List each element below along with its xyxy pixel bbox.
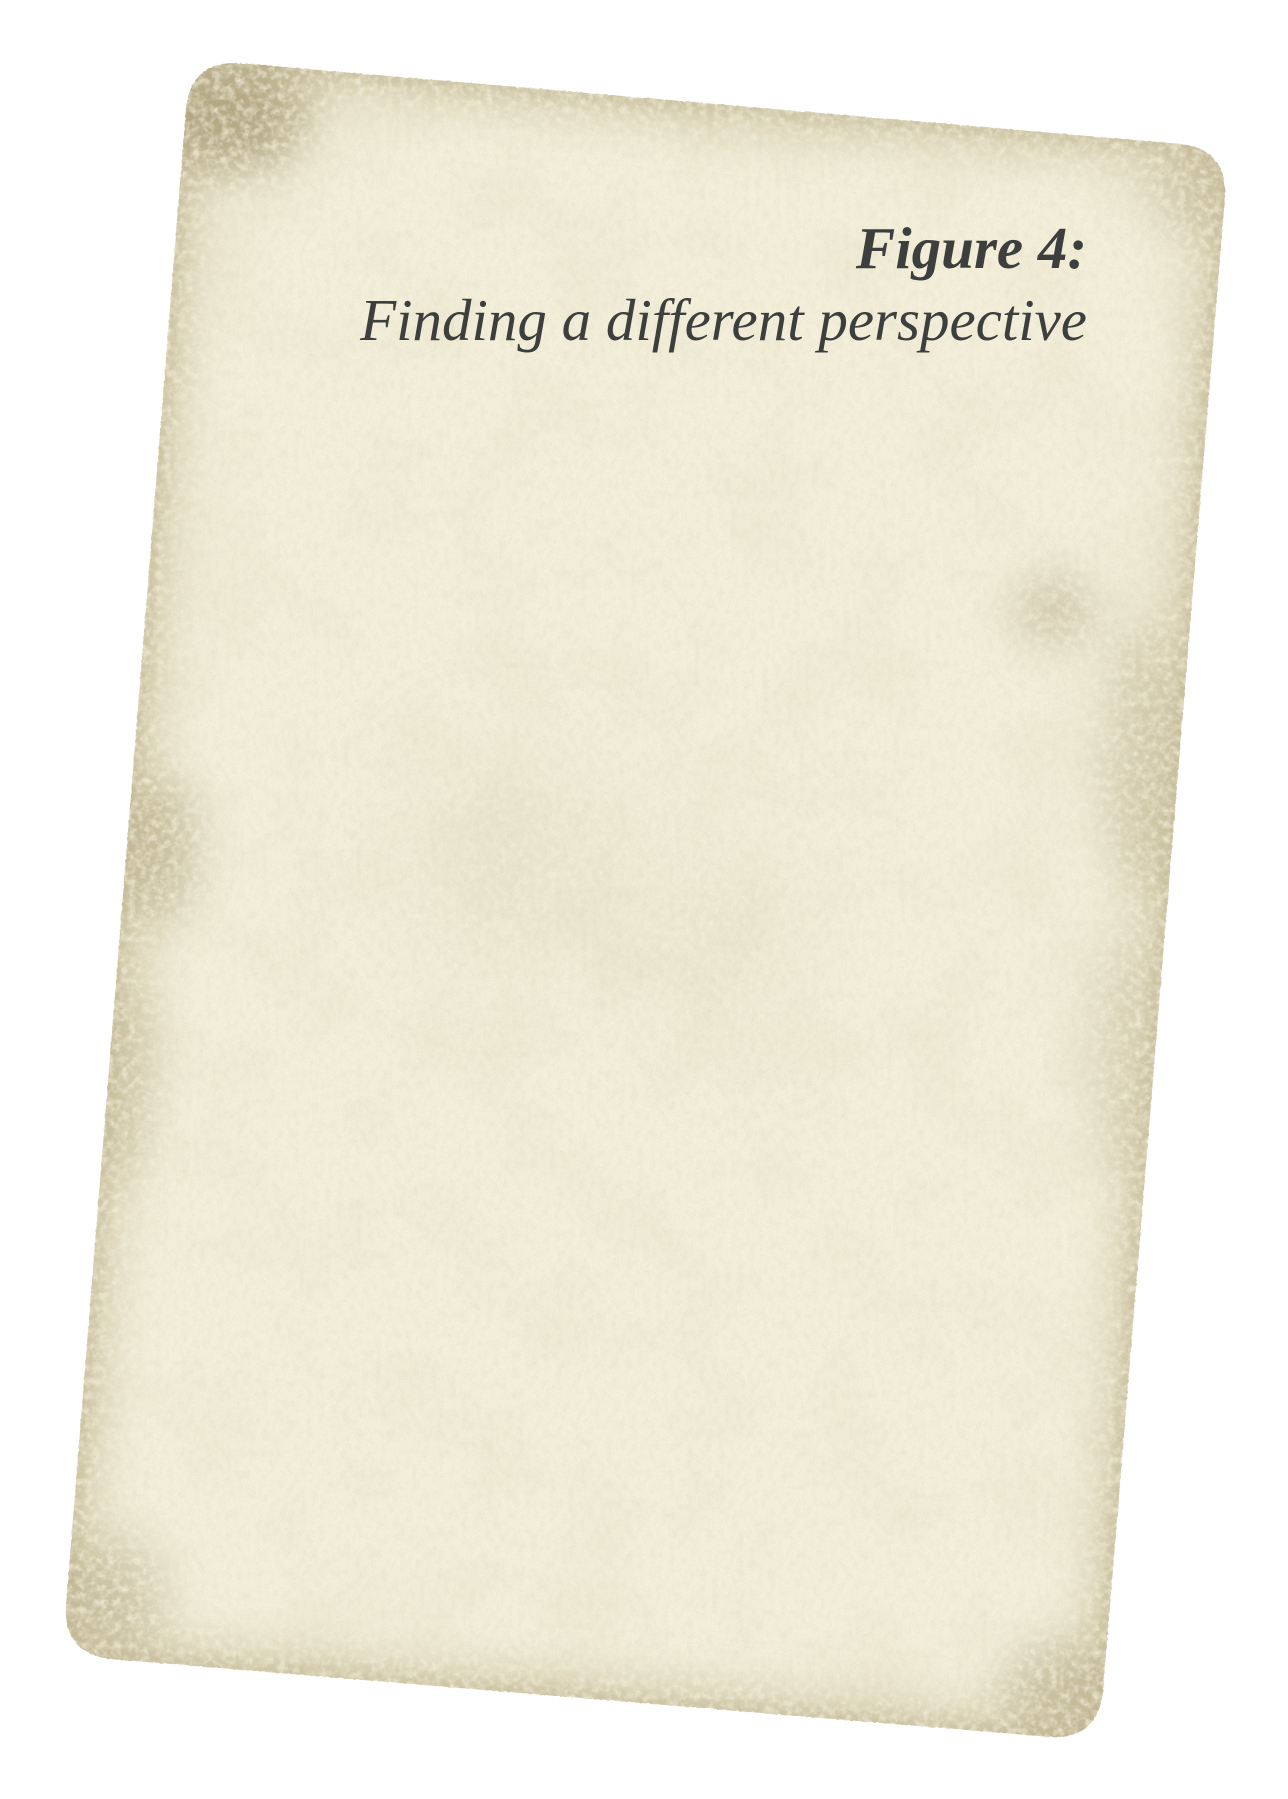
subtitle: figure caption: Finding a different perspective (359, 287, 1087, 353)
title: figure number: Figure 4: (855, 215, 1087, 281)
